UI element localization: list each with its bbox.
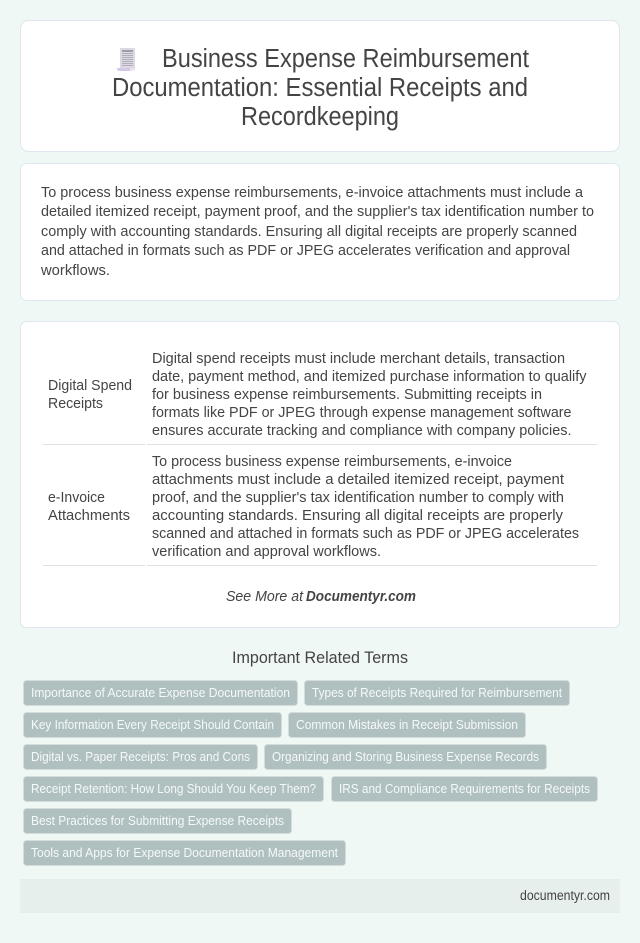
- tag: Types of Receipts Required for Reimbursement: [312, 686, 562, 700]
- tag: [304, 680, 570, 706]
- table row: e-invoice attachments: verification and approval workflows.: [152, 544, 381, 560]
- text block: intro: To process business expense reimbursements, e-invoice attachments must include a: [41, 185, 584, 201]
- table row: digital spend receipts: [43, 351, 597, 445]
- tag: [24, 840, 346, 866]
- tag: Importance of Accurate Expense Documentation: [31, 686, 290, 700]
- footer: documentyr.com: [520, 888, 610, 903]
- tag: [24, 808, 292, 834]
- heading: title: Recordkeeping: [241, 103, 399, 131]
- link: see more: Documentyr.com: [306, 589, 416, 605]
- text block: intro: [40, 185, 594, 279]
- table row: digital spend receipts: ensures accurate tracking and compliance with company policies.: [152, 423, 572, 439]
- panel: table card: [20, 322, 620, 628]
- heading: important related terms: Important Related Terms: [232, 649, 408, 667]
- table row: e-invoice attachments: attachments must include a detailed itemized receipt, payment: [152, 472, 564, 488]
- tag: [24, 680, 298, 706]
- tag: Common Mistakes in Receipt Submission: [296, 718, 518, 732]
- text block: intro: comply with accounting standards. Ensuring all digital receipts are properly scanned: [41, 224, 577, 240]
- tag: IRS and Compliance Requirements for Receipts: [339, 782, 590, 796]
- tag: [288, 712, 526, 738]
- table row: digital spend receipts: formats like PDF or JPEG through expense management software: [152, 405, 572, 421]
- table row: digital spend receipts: date, payment method, and itemized purchase information to qualify: [152, 369, 587, 385]
- text block: intro: and attached in formats such as PDF or JPEG accelerates verification and approval: [41, 243, 570, 259]
- link: see more: See More at: [226, 589, 304, 605]
- tag: [24, 776, 324, 802]
- table row: digital spend receipts: for business expense reimbursements. Submitting receipts in: [152, 387, 542, 403]
- table row: digital spend receipts: Digital spend receipts must include merchant details, transaction: [152, 351, 565, 367]
- table row: e-invoice attachments: Attachments: [48, 508, 130, 524]
- heading: title: [112, 45, 529, 131]
- tag: [332, 776, 598, 802]
- table row: e-invoice attachments: [43, 454, 597, 566]
- table row: e-invoice attachments: e-Invoice: [48, 490, 105, 506]
- tag: Key Information Every Receipt Should Contain: [31, 718, 274, 732]
- table row: e-invoice attachments: accounting standards. Ensuring all digital receipts are properly: [152, 508, 564, 524]
- icon: receipt: [117, 48, 135, 71]
- tag: Receipt Retention: How Long Should You Keep Them?: [31, 782, 316, 796]
- tag: [264, 744, 546, 770]
- table row: e-invoice attachments: proof, and the supplier's tax identification number to comply with: [152, 490, 564, 506]
- tag: Best Practices for Submitting Expense Receipts: [31, 814, 284, 828]
- tag: Digital vs. Paper Receipts: Pros and Cons: [31, 750, 250, 764]
- heading: title: Documentation: Essential Receipts and: [112, 74, 528, 102]
- table row: e-invoice attachments: scanned and attached in formats such as PDF or JPEG accelerates: [152, 526, 579, 542]
- tag: [24, 744, 258, 770]
- tag: Tools and Apps for Expense Documentation Management: [31, 846, 338, 860]
- panel: title card: [20, 20, 620, 152]
- panel: intro paragraph: [20, 164, 620, 300]
- heading: title: Business Expense Reimbursement: [162, 45, 529, 73]
- link: see more: [226, 589, 416, 605]
- tag: [24, 712, 282, 738]
- footer: [20, 879, 620, 913]
- panel: related term tags: [24, 680, 598, 866]
- table row: digital spend receipts: Digital Spend: [48, 378, 132, 394]
- table row: e-invoice attachments: To process business expense reimbursements, e-invoice: [152, 454, 512, 470]
- text block: intro: detailed itemized receipt, payment proof, and the supplier's tax identification number to: [41, 204, 594, 220]
- text block: intro: workflows.: [40, 263, 110, 279]
- table row: digital spend receipts: Receipts: [48, 396, 103, 412]
- tag: Organizing and Storing Business Expense Records: [272, 750, 539, 764]
